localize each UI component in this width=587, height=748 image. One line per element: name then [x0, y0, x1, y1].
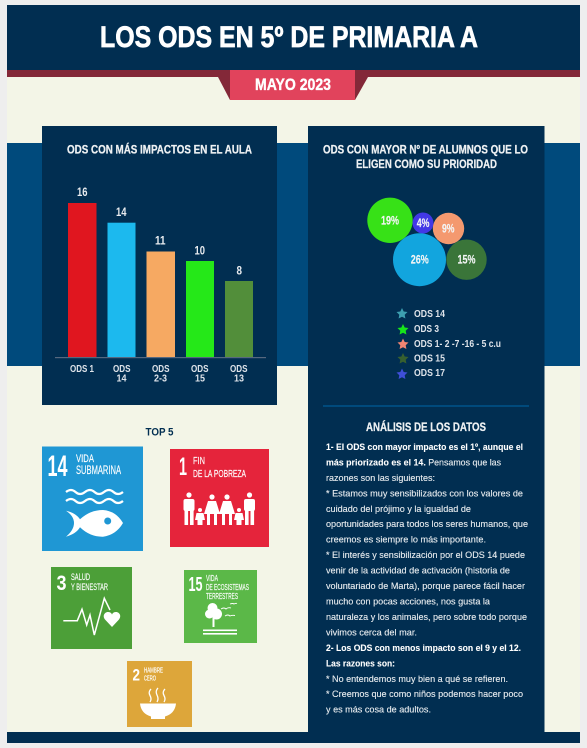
bar chart: 2-3	[154, 372, 167, 384]
panel: priorities and analysis	[308, 126, 544, 732]
bar chart: 10	[194, 244, 205, 258]
bubble chart legend: ODS 17	[414, 368, 445, 379]
icon: SDG 2 zero hunger: CERO	[144, 676, 156, 682]
analysis text: * Estamos muy sensibilizados con los valores de	[326, 488, 523, 499]
bubble chart: 4%	[417, 216, 430, 230]
analysis text: voluntariado de Marta), porque parece fácil hacer	[326, 581, 526, 592]
analysis text: mucho con pocas acciones, nos gusta la	[326, 596, 491, 608]
title banner	[7, 5, 580, 70]
analysis text: Las razones son:	[326, 658, 395, 669]
icon: SDG 1 no poverty	[170, 449, 269, 547]
bubble chart: 15%	[458, 252, 476, 266]
analysis text: 1- El ODS con mayor impacto es el 1º, aunque el	[326, 442, 523, 453]
bar chart: 14	[116, 372, 127, 384]
icon: SDG 3 good health	[51, 567, 132, 649]
bubble chart	[367, 198, 487, 286]
bubble chart heading: ODS CON MAYOR Nº DE ALUMNOS QUE LO	[323, 142, 528, 156]
icon: SDG 14 life below water: SUBMARINA	[76, 463, 121, 477]
bar chart: 16	[77, 185, 88, 199]
analysis text: * Creemos que como niños podemos hacer poco	[326, 689, 523, 700]
analysis text: cuidado del prójimo y la igualdad de	[326, 504, 471, 515]
analysis text: naturaleza y los animales, pero sobre todo porque	[326, 612, 527, 623]
bar chart: ODS	[152, 363, 170, 375]
analysis text: oportunidades para todos los seres humanos, que	[326, 519, 528, 530]
bubble chart legend: ODS 1- 2 -7 -16 - 5 c.u	[414, 339, 501, 350]
icon: SDG 14 life below water: 14	[48, 450, 68, 483]
icon: SDG 15 life on land: TERRESTRES	[206, 591, 238, 601]
bubble chart: 9%	[442, 222, 455, 236]
analysis text: más priorizado es el 14. Pensamos que las	[326, 458, 501, 468]
panel: bar chart	[42, 126, 277, 405]
analysis text: * No entendemos muy bien a qué se refieren.	[326, 674, 508, 685]
analysis text: razones son las siguientes:	[326, 473, 435, 484]
icon: SDG 1 no poverty: FIN	[193, 455, 205, 467]
bar chart: ODS 1	[70, 363, 94, 375]
icon: SDG 3 good health: Y BIENESTAR	[71, 582, 108, 593]
icon: SDG 1 no poverty: DE LA POBREZA	[193, 468, 246, 480]
bubble chart heading	[323, 142, 528, 171]
bar chart: 15	[195, 372, 205, 384]
bar chart: ODS	[230, 363, 248, 375]
footer band	[7, 732, 580, 743]
analysis text: * El interés y sensibilización por el ODS 14 puede	[326, 550, 525, 561]
analysis text: 2- Los ODS con menos impacto son el 9 y el 12.	[326, 643, 521, 654]
top 5 heading: TOP 5	[146, 426, 174, 438]
icon: SDG 14 life below water: VIDA	[76, 453, 94, 465]
bubble chart: 19%	[381, 214, 399, 228]
icon: SDG 15 life on land	[184, 570, 257, 643]
analysis text: creemos es siempre lo más importante.	[326, 535, 486, 546]
analysis text: venir de la actividad de activación (historia de	[326, 566, 510, 577]
bubble chart heading: ELIGEN COMO SU PRIORIDAD	[356, 157, 497, 171]
icon: SDG 1 no poverty: 1	[179, 453, 187, 481]
bubble chart legend: ODS 15	[414, 354, 445, 364]
bar chart	[55, 185, 266, 384]
date ribbon	[7, 70, 580, 100]
icon: SDG 2 zero hunger: HAMBRE	[144, 668, 163, 674]
analysis text: y es más cosa de adultos.	[326, 705, 431, 716]
date ribbon: MAYO 2023	[255, 76, 331, 94]
bar chart: 8	[236, 264, 242, 278]
title banner: LOS ODS EN 5º DE PRIMARIA A	[100, 21, 478, 54]
icon: SDG 14 life below water	[42, 446, 143, 551]
bubble chart legend: ODS 3	[414, 324, 439, 335]
bubble chart legend: ODS 14	[414, 309, 445, 320]
bar chart: ODS	[191, 363, 208, 375]
bar chart: ODS	[113, 363, 130, 375]
icon: SDG 2 zero hunger	[127, 661, 192, 727]
icon: SDG 15 life on land: VIDA	[206, 573, 218, 583]
analysis text: vivimos cerca del mar.	[326, 627, 417, 638]
analysis text	[326, 442, 528, 716]
bubble chart legend	[396, 308, 501, 379]
analysis heading: ANÁLISIS DE LOS DATOS	[366, 419, 486, 434]
bar chart: 13	[234, 372, 244, 384]
bubble chart: 26%	[411, 252, 429, 266]
icon: SDG 15 life on land: 15	[188, 574, 202, 596]
icon: SDG 3 good health: SALUD	[71, 572, 90, 583]
bar chart: 14	[116, 205, 127, 219]
bar chart heading: ODS CON MÁS IMPACTOS EN EL AULA	[67, 142, 252, 156]
icon: SDG 3 good health: 3	[56, 572, 66, 595]
icon: SDG 2 zero hunger: 2	[132, 666, 140, 684]
icon: SDG 15 life on land: DE ECOSISTEMAS	[206, 582, 249, 592]
bar chart: 11	[155, 234, 166, 248]
